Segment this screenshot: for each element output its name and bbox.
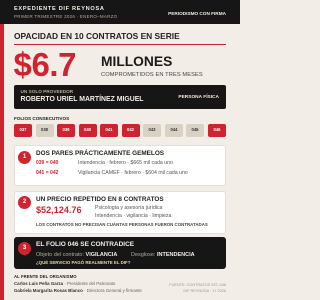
badge 3 [18, 242, 31, 255]
card 2 note: LOS CONTRATOS NO PRECISAN CUÁNTAS PERSONAS FUERON CONTRATADAS [36, 222, 208, 226]
pair 1: 039 = 040 [36, 160, 58, 166]
panel 3 object: Objeto del contrato: VIGILANCIA [36, 252, 117, 258]
supplier type: PERSONA FÍSICA [178, 94, 219, 100]
folios row: 046 [214, 127, 220, 132]
header band [0, 0, 240, 24]
panel 3 question: ¿QUÉ SERVICIO PAGÓ REALMENTE EL DIF? [36, 260, 130, 265]
folios row: 039 [62, 127, 70, 132]
card 2 [14, 191, 226, 234]
badge 1 [18, 151, 31, 164]
supplier panel [14, 85, 226, 109]
header tag: PERIODISMO CON FIRMA [168, 10, 226, 16]
footer person 1: Carlos Luis Peña Garza · Presidente del Patronato [14, 281, 115, 286]
pair 1 detail: Intendencia · febrero · $665 mil cada uno [78, 160, 173, 166]
badge 2 [18, 196, 31, 209]
pair 2: 041 = 042 [36, 170, 58, 176]
card 1 [14, 145, 226, 186]
folios row: 043 [148, 127, 156, 132]
badge 2: 2 [23, 199, 26, 205]
badge 1: 1 [23, 154, 26, 160]
folios row: 038 [41, 127, 48, 132]
card 1 title: DOS PARES PRÁCTICAMENTE GEMELOS [36, 150, 164, 157]
folios label: FOLIOS CONSECUTIVOS [14, 116, 69, 120]
folios row [14, 124, 226, 137]
price detail 1: Psicología y asesoría jurídica [95, 205, 162, 211]
footer person 2: Gabriela Margarita Rosas Blanco · Directora General y firmante [14, 288, 142, 293]
source line 1: FUENTE: CONTRATOS 037–046 [169, 283, 226, 287]
footer heading: AL FRENTE DEL ORGANISMO [14, 274, 77, 279]
header subtitle: PRIMER TRIMESTRE 2026 · ENERO–MARZO [14, 14, 117, 19]
left red bar [0, 24, 4, 300]
folios row: 044 [170, 127, 178, 132]
source line 2: DIF REYNOSA · 17 2026 [183, 289, 226, 293]
main heading: OPACIDAD EN 10 CONTRATOS EN SERIE [14, 31, 180, 41]
millones subtitle: COMPROMETIDOS EN TRES MESES [101, 72, 203, 78]
millones: MILLONES [101, 54, 172, 69]
folios row: 037 [20, 127, 26, 132]
folios row: 041 [106, 127, 112, 132]
repeated price: $52,124.76 [36, 205, 82, 215]
panel 3 breakdown: Desglose: INTENDENCIA [131, 252, 195, 258]
card 2 title: UN PRECIO REPETIDO EN 8 CONTRATOS [36, 196, 164, 203]
panel 3 title: EL FOLIO 046 SE CONTRADICE [36, 241, 134, 248]
supplier label: UN SOLO PROVEEDOR [20, 89, 73, 94]
folios row: 042 [127, 127, 134, 132]
folios row: 045 [192, 127, 198, 132]
supplier name: ROBERTO URIEL MARTÍNEZ MIGUEL [20, 96, 144, 103]
big number: $6.7 [14, 46, 76, 83]
badge 3: 3 [23, 245, 26, 251]
heading rule [14, 44, 226, 45]
price detail 2: Intendencia · vigilancia · limpieza [95, 213, 171, 219]
pair 2 detail: Vigilancia CAMEF · febrero · $604 mil cada uno [78, 170, 188, 176]
header title: EXPEDIENTE DIF REYNOSA [14, 6, 105, 12]
panel 3 [14, 237, 226, 269]
folios row: 040 [84, 127, 91, 132]
